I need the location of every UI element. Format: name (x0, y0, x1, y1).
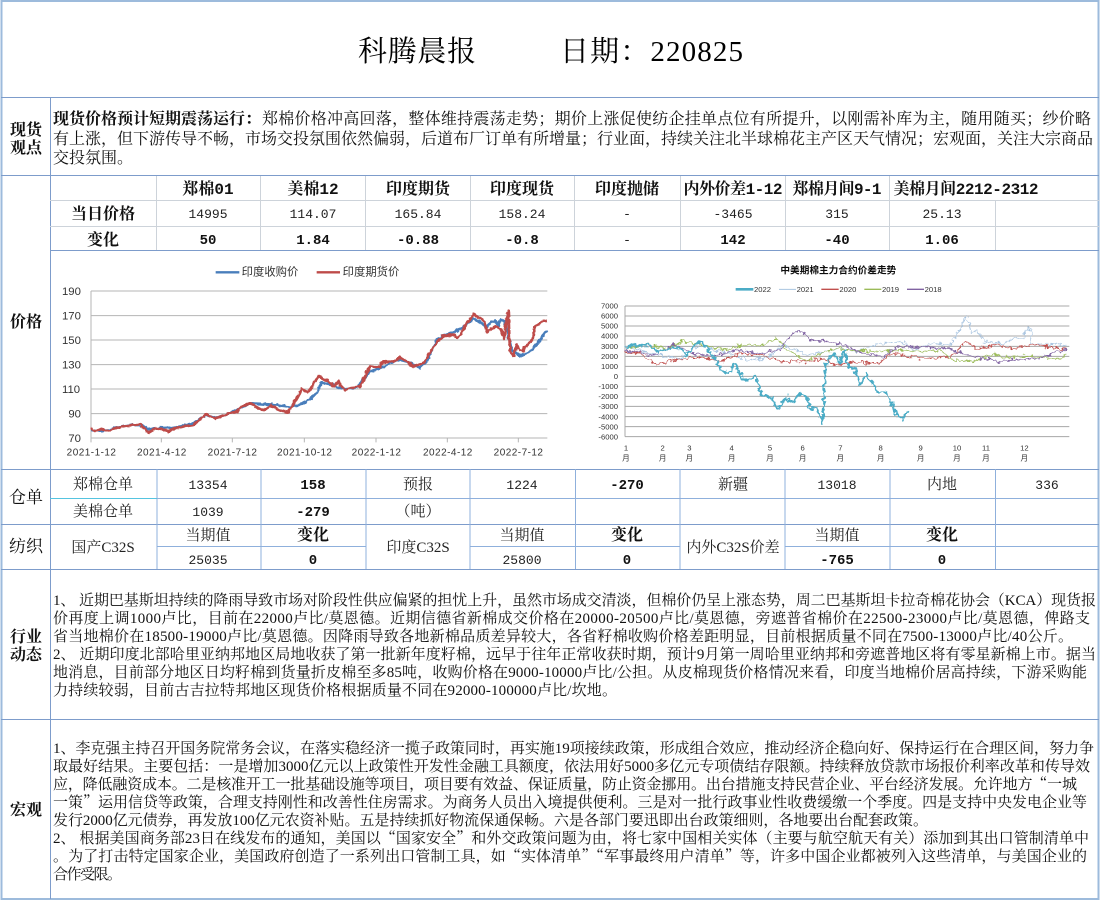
section label: 宏观: 宏观 (10, 801, 42, 819)
price table: 14995 (188, 207, 228, 222)
macro news text (53, 739, 1094, 883)
price table: 1.06 (925, 233, 959, 249)
macro news text: 2、 根据美国商务部23日在线发布的通知，美国以“国家安全”和外交政策问题为由，将七家中国相关实体（主要与航空航天有关）添加到其出口管制清单中 (53, 827, 1089, 848)
line chart: India prices: 110 (62, 384, 80, 396)
legend: 印度收购价 (242, 265, 298, 279)
line chart: China-US cotton spread (598, 264, 1069, 462)
line chart: China-US cotton spread: 2000 (601, 352, 618, 361)
price table: 内外价差1-12 (684, 179, 782, 199)
line chart: India prices: 2021-7-12 (208, 447, 257, 458)
price table: 50 (200, 233, 216, 249)
warehouse table: 郑棉仓单 (73, 476, 133, 493)
legend (736, 285, 942, 294)
warehouse table: 13354 (188, 478, 228, 493)
line chart: China-US cotton spread: -3000 (598, 402, 618, 411)
price table: - (623, 233, 631, 248)
section label: 行业动态 (10, 628, 44, 664)
line chart: China-US cotton spread: 月 (877, 453, 884, 462)
line chart: India prices: 70 (68, 433, 81, 445)
section label: 现货观点 (10, 120, 44, 157)
price table: -3465 (713, 207, 753, 222)
warehouse table: 预报 (403, 475, 433, 493)
legend: 2022 (754, 285, 771, 294)
line chart: China-US cotton spread: 12 (1020, 443, 1029, 452)
line chart: China-US cotton spread: -5000 (598, 422, 618, 431)
price table: 25.13 (922, 207, 962, 222)
legend: 2021 (797, 285, 814, 294)
price table: 当日价格 (71, 204, 135, 224)
section label: 价格: 价格 (10, 312, 42, 331)
line chart: China-US cotton spread: 11 (982, 443, 990, 452)
legend: 印度期货价 (343, 265, 399, 279)
section label: 行业动态: 行业 (10, 628, 42, 646)
yarn table: 变化 (926, 525, 958, 545)
yarn table: 内外C32S价差 (686, 539, 780, 556)
line chart: India prices: 90 (68, 409, 81, 421)
warehouse table: （吨） (395, 503, 441, 520)
legend: 2019 (882, 285, 899, 294)
price table: 114.07 (290, 207, 336, 222)
warehouse table: -279 (296, 505, 330, 521)
spot opinion text: 交投氛围。 (53, 149, 133, 167)
price table: 印度现货 (490, 179, 556, 199)
line chart: India prices: 150 (62, 335, 81, 347)
line chart: China-US cotton spread: -6000 (598, 432, 618, 441)
line chart: China-US cotton spread: 3 (687, 443, 691, 452)
industry news text: 2、 近期印度北部哈里亚纳邦地区局地收获了第一批新年度籽棉，远早于往年正常收获时期，预计9月第一周哈里亚纳邦和旁遮普地区将有零星新棉上市。据当 (53, 645, 1096, 663)
line chart: China-US cotton spread: 4000 (601, 332, 618, 341)
price table: 1.84 (296, 233, 330, 249)
yarn table: 0 (938, 553, 946, 569)
line chart: India prices: 2022-1-12 (352, 447, 401, 458)
industry news text: 1、 近期巴基斯坦持续的降雨导致市场对阶段性供应偏紧的担忧上升，虽然市场成交清淡，但棉价仍呈上涨态势，周二巴基斯坦卡拉奇棉花协会（KCA）现货报 (53, 591, 1096, 609)
price table: 142 (720, 233, 746, 249)
price table: 美棉12 (287, 179, 339, 199)
line chart: India prices: 2022-4-12 (423, 447, 473, 458)
legend: 2020 (839, 285, 856, 294)
price table: 315 (825, 207, 849, 222)
yarn table: 当期值 (499, 526, 545, 544)
yarn table: 当期值 (814, 526, 860, 544)
warehouse table: 内地 (927, 475, 957, 493)
line chart: China-US cotton spread: 月 (799, 453, 807, 462)
line chart: China-US cotton spread: 1000 (601, 362, 618, 371)
line chart: China-US cotton spread: 9 (919, 443, 923, 452)
macro news text: 发行2000亿元债券，再发放100亿元农资补贴。五是持续抓好物流保通保畅。六是各部门要迅即出台政策细则，各地要出台配套政策。 (53, 811, 928, 829)
line chart: India prices (62, 265, 547, 458)
line chart: China-US cotton spread: 4 (730, 443, 735, 452)
section label: 行业动态: 动态 (10, 645, 44, 664)
line chart: China-US cotton spread: 月 (917, 453, 924, 462)
yarn table: 变化 (297, 525, 329, 545)
title (358, 35, 743, 68)
price table: - (623, 207, 631, 222)
line chart: China-US cotton spread: 6000 (601, 312, 618, 321)
industry news text: 价再度上调1000卢比，目前在22000卢比/莫恩德。近期信德省新棉成交价格在20000-20500卢比/莫恩德，旁遮普省棉价在22500-23000卢比/莫恩德，俾路支 (53, 609, 1090, 627)
price table: 变化 (87, 230, 119, 250)
line chart: China-US cotton spread: 0 (614, 372, 618, 381)
line chart: China-US cotton spread: 月 (622, 453, 630, 462)
line chart: India prices: 2021-1-12 (67, 447, 116, 458)
line chart: China-US cotton spread: 5000 (601, 322, 618, 331)
line chart: India prices: 2021-4-12 (137, 447, 187, 458)
line chart: China-US cotton spread: 1 (624, 443, 628, 452)
spot opinion text: 郑棉价格冲高回落，整体维持震荡走势；期价上涨促使纺企挂单点位有所提升，以刚需补库为主，随用随买；纱价略 (262, 109, 1091, 128)
yarn table (71, 525, 958, 569)
line chart: China-US cotton spread: 月 (728, 453, 736, 462)
macro news text: 合作受限。 (53, 866, 122, 883)
line chart: China-US cotton spread: 月 (982, 453, 990, 462)
spot opinion text: 有上涨，但下游传导不畅，市场交投氛围依然偏弱，后道布厂订单有所增量；行业面，持续关注北半球棉花主产区天气情况；宏观面，关注大宗商品 (53, 129, 1093, 148)
line chart: China-US cotton spread: 5 (768, 443, 772, 452)
line chart: India prices: 130 (62, 360, 81, 372)
spot opinion text (53, 109, 1093, 167)
yarn table: 当期值 (185, 526, 231, 544)
line chart: China-US cotton spread: 月 (836, 453, 844, 462)
price table: 印度期货 (386, 179, 452, 199)
section label: 现货观点: 现货 (10, 120, 44, 139)
industry news text: 地消息，目前部分地区日均籽棉到货量折皮棉至多85吨，收购价格在9000-10000卢比/公担。从皮棉现货价格情况来看，印度当地棉价居高持续，下游采购能 (53, 663, 1087, 681)
industry news text: 力持续较弱，目前古吉拉特邦地区现货价格根据质量不同在92000-100000卢比/坎地。 (53, 681, 617, 699)
title: 科腾晨报 (358, 35, 476, 68)
yarn table: 国产C32S (71, 539, 135, 556)
line chart: China-US cotton spread: 月 (1020, 453, 1028, 462)
spot opinion text: 现货价格预计短期震荡运行： (53, 109, 261, 128)
line chart: China-US cotton spread: 月 (953, 453, 961, 462)
price table: 印度抛储 (595, 179, 659, 199)
warehouse table: 13018 (817, 478, 857, 493)
price table: -0.8 (505, 233, 539, 249)
warehouse table: 美棉仓单 (73, 503, 133, 520)
title: 日期：220825 (560, 35, 743, 68)
line chart: China-US cotton spread: 月 (766, 453, 774, 462)
macro news text: 取最好结果。主要包括：一是增加3000亿元以上政策性开发性金融工具额度，依法用好5000多亿元专项债结存限额。持续释放贷款市场报价利率改革和传导效 (53, 757, 1090, 775)
warehouse table: 1224 (506, 478, 538, 493)
line chart: China-US cotton spread: 8 (879, 443, 883, 452)
warehouse table: 336 (1035, 478, 1059, 493)
macro news text: 应，降低融资成本。二是核准开工一批基础设施等项目，项目要有效益、保证质量，防止资金挪用。出台措施支持民营企业、平台经济发展。允许地方“一城 (53, 773, 1077, 794)
macro news text: 1、李克强主持召开国务院常务会议，在落实稳经济一揽子政策同时，再实施19项接续政策，形成组合效应，推动经济企稳向好、保持运行在合理区间，努力争 (53, 739, 1094, 757)
line chart: China-US cotton spread: 3000 (601, 342, 618, 351)
warehouse table: 新疆 (718, 476, 748, 493)
yarn table: 变化 (611, 525, 643, 545)
line chart: China-US cotton spread: 6 (801, 443, 805, 452)
yarn table: -765 (820, 553, 854, 569)
yarn table: 0 (623, 553, 631, 569)
section label: 现货观点: 观点 (10, 138, 43, 157)
macro news text: 一策”运用信贷等政策，合理支持刚性和改善性住房需求。为商务人员出入境提供便利。三是对一批行政事业性收费缓缴一个季度。四是支持中央发电企业等 (53, 791, 1087, 812)
price table: 165.84 (395, 207, 442, 222)
warehouse table: 1039 (192, 505, 224, 520)
line chart: China-US cotton spread: -4000 (598, 412, 618, 421)
line chart: China-US cotton spread: 7000 (601, 302, 618, 311)
line chart: China-US cotton spread: 中美期棉主力合约价差走势 (780, 264, 897, 276)
warehouse table (73, 475, 1059, 521)
industry news text (53, 591, 1096, 699)
price table: 郑棉月间9-1 (792, 179, 882, 199)
line chart: China-US cotton spread: 月 (659, 453, 667, 462)
line chart: India prices: 190 (62, 286, 81, 298)
line chart: China-US cotton spread: -1000 (598, 382, 618, 391)
line chart: China-US cotton spread: -2000 (598, 392, 618, 401)
line chart: China-US cotton spread: 10 (953, 443, 961, 452)
yarn table: 印度C32S (386, 538, 450, 556)
line chart: China-US cotton spread: 7 (838, 443, 842, 452)
price table: -0.88 (397, 233, 439, 249)
warehouse table: -270 (610, 478, 644, 494)
price table: 158.24 (499, 207, 546, 222)
legend: 2018 (925, 285, 942, 294)
price table: 郑棉01 (182, 179, 234, 199)
line chart: China-US cotton spread: 月 (685, 453, 693, 462)
yarn table: 0 (309, 553, 317, 569)
section label: 仓单: 仓单 (9, 488, 43, 507)
line chart: India prices: 2022-7-12 (494, 447, 543, 458)
warehouse table: 158 (300, 478, 326, 494)
yarn table: 25035 (188, 553, 228, 568)
macro news text: 。为了打击特定国家企业，美国政府创造了一系列出口管制工具，如“实体清单”“军事最终用户清单”等，许多中国企业都被列入这些清单，与美国企业的 (53, 845, 1087, 866)
section label: 纺织: 纺织 (9, 537, 44, 556)
price table: -40 (824, 233, 850, 249)
price table (71, 179, 1038, 250)
legend (216, 265, 399, 279)
yarn table: 25800 (502, 553, 542, 568)
price table: 美棉月间2212-2312 (894, 179, 1038, 199)
line chart: India prices: 2021-10-12 (277, 447, 332, 458)
line chart: China-US cotton spread: 2 (661, 443, 665, 452)
line chart: India prices: 170 (62, 311, 81, 323)
industry news text: 省当地棉价在18500-19000卢比/莫恩德。因降雨导致各地新棉品质差异较大，各省籽棉收购价格差距明显，目前根据质量不同在7500-13000卢比/40公斤。 (53, 627, 1073, 645)
